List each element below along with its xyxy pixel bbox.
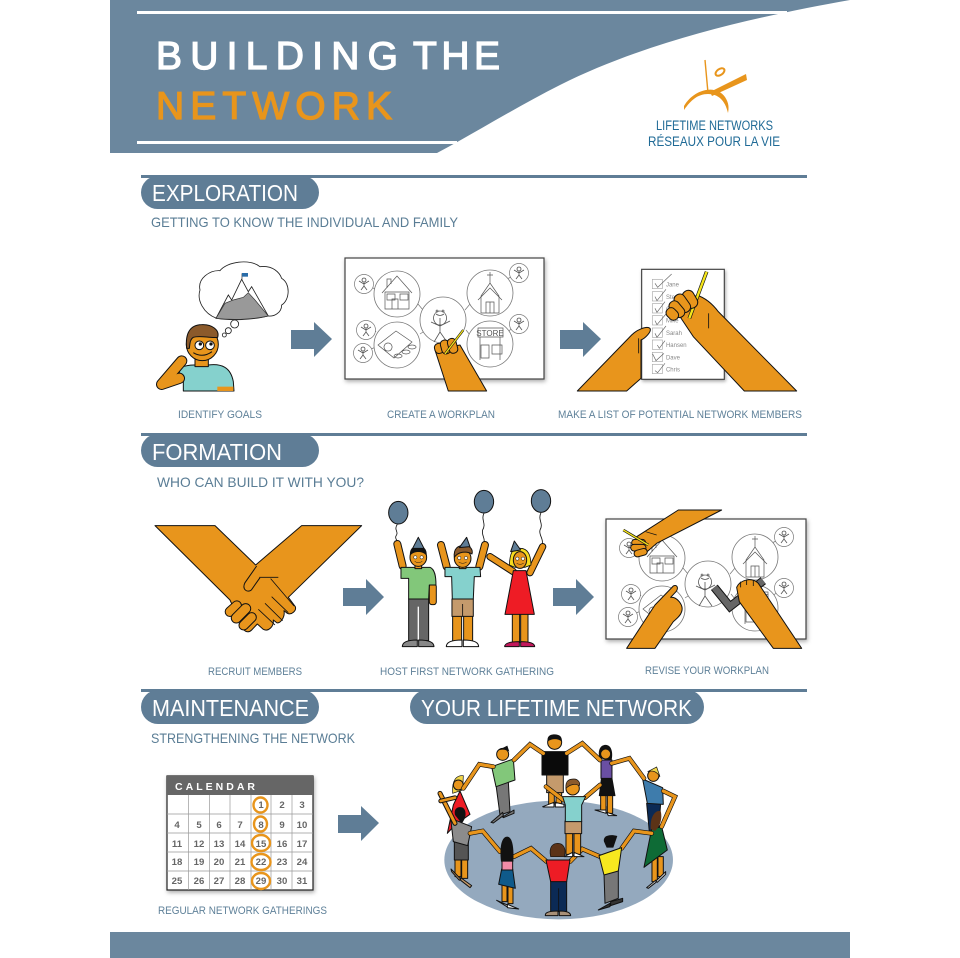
calendar: 11: [172, 839, 183, 850]
front people: [497, 835, 623, 916]
checklist paper: Mike: [666, 319, 679, 325]
calendar: 25: [172, 876, 183, 887]
caption: HOST FIRST NETWORK GATHERING: [380, 666, 554, 678]
thought bubbles: [222, 320, 239, 337]
left hand: [577, 327, 650, 391]
calendar: 1: [258, 800, 264, 811]
calendar: 31: [297, 876, 308, 887]
calendar: 13: [214, 839, 224, 850]
arrow: [291, 322, 332, 357]
person: teal shirt: [441, 490, 494, 647]
calendar: 4: [174, 820, 180, 831]
revised workplan board: [606, 519, 806, 639]
header banner: [110, 0, 850, 153]
formation subtitle: WHO CAN BUILD IT WITH YOU?: [157, 474, 364, 490]
centre person: [546, 779, 600, 857]
icon: hand drawing on workplan: [434, 330, 487, 391]
caption: CREATE A WORKPLAN: [387, 409, 495, 421]
pointing hand: [627, 585, 682, 648]
arm chain: [463, 743, 675, 862]
calendar: 9: [279, 820, 285, 831]
checklist paper: Hansen: [666, 343, 687, 349]
icon: hands with checklist: [577, 269, 797, 391]
caption: RECRUIT MEMBERS: [208, 666, 302, 678]
calendar: 30: [277, 876, 287, 887]
exploration subtitle: GETTING TO KNOW THE INDIVIDUAL AND FAMILY: [151, 214, 459, 230]
calendar: 20: [214, 857, 224, 868]
calendar: 12: [194, 839, 204, 850]
checklist paper: Jane: [666, 282, 680, 288]
person: green shirt: [389, 501, 436, 647]
section heading: your lifetime network: YOUR LIFETIME NETWORK: [421, 695, 693, 721]
caption: MAKE A LIST OF POTENTIAL NETWORK MEMBERS: [558, 409, 802, 421]
title line 1: THE: [413, 35, 500, 78]
title line 2: NETWORK: [156, 85, 392, 128]
calendar: 21: [235, 857, 246, 868]
calendar: 19: [194, 857, 204, 868]
workplan board: [345, 258, 544, 379]
logo: [648, 60, 780, 149]
checklist paper: Sarah: [666, 331, 682, 337]
caption: REGULAR NETWORK GATHERINGS: [158, 905, 327, 917]
section heading: formation: [141, 433, 807, 467]
checklist paper: Steve: [666, 295, 682, 301]
calendar: 22: [256, 857, 266, 868]
calendar: 18: [172, 857, 183, 868]
footer bar: [110, 932, 850, 958]
logo: RÉSEAUX POUR LA VIE: [648, 134, 780, 149]
checklist paper: Dave: [666, 355, 681, 361]
calendar: 17: [297, 839, 307, 850]
icon: hands revising workplan: [623, 510, 802, 648]
calendar: 27: [214, 876, 224, 887]
checklist paper: [642, 269, 724, 379]
section heading: exploration: EXPLORATION: [152, 180, 298, 206]
arrow: [553, 579, 594, 615]
base ellipse: [444, 801, 673, 919]
arrow: [560, 322, 601, 357]
calendar: 26: [194, 876, 204, 887]
icon: person thinking of a mountain goal: [162, 262, 288, 391]
side people: [440, 776, 667, 888]
mountain with flag: [216, 273, 268, 319]
icon: handshake: [155, 526, 362, 632]
calendar: 16: [277, 839, 287, 850]
illustration: three people with party hats and balloons: [389, 490, 494, 647]
top hand with pencil: [623, 510, 722, 558]
calendar: 6: [216, 820, 222, 831]
calendar: 23: [277, 857, 287, 868]
arrow: [338, 806, 379, 841]
section heading: exploration: [141, 175, 807, 209]
calendar: 8: [258, 820, 264, 831]
calendar: 7: [237, 820, 243, 831]
illustration: circle of people holding hands: [440, 734, 675, 919]
logo: LIFETIME NETWORKS: [656, 118, 773, 133]
person: woman in red dress: [490, 490, 551, 647]
checklist paper: Chris: [666, 368, 680, 374]
back row people: [491, 734, 663, 832]
section heading: maintenance: MAINTENANCE: [152, 695, 309, 721]
person: [162, 325, 234, 391]
right arm and fist: [664, 272, 797, 391]
arrow: [343, 579, 384, 615]
calendar: 2: [279, 800, 285, 811]
thought cloud: [199, 262, 288, 320]
checklist paper: Carl: [666, 307, 677, 313]
maintenance subtitle: STRENGTHENING THE NETWORK: [151, 730, 356, 746]
calendar: 24: [297, 857, 308, 868]
title line 1: BUILDING: [156, 35, 398, 78]
calendar: 15: [256, 839, 267, 850]
calendar: 3: [299, 800, 305, 811]
section heading: maintenance: [141, 689, 807, 724]
calendar: 14: [235, 839, 246, 850]
hand holding tool: [714, 579, 802, 648]
section heading: formation: FORMATION: [152, 439, 282, 465]
caption: REVISE YOUR WORKPLAN: [645, 665, 769, 677]
calendar: CALENDAR: [175, 781, 255, 793]
calendar: 28: [235, 876, 246, 887]
calendar: 29: [256, 876, 266, 887]
caption: IDENTIFY GOALS: [178, 409, 262, 421]
calendar: 10: [297, 820, 307, 831]
calendar: 5: [196, 820, 202, 831]
calendar: [167, 776, 313, 890]
